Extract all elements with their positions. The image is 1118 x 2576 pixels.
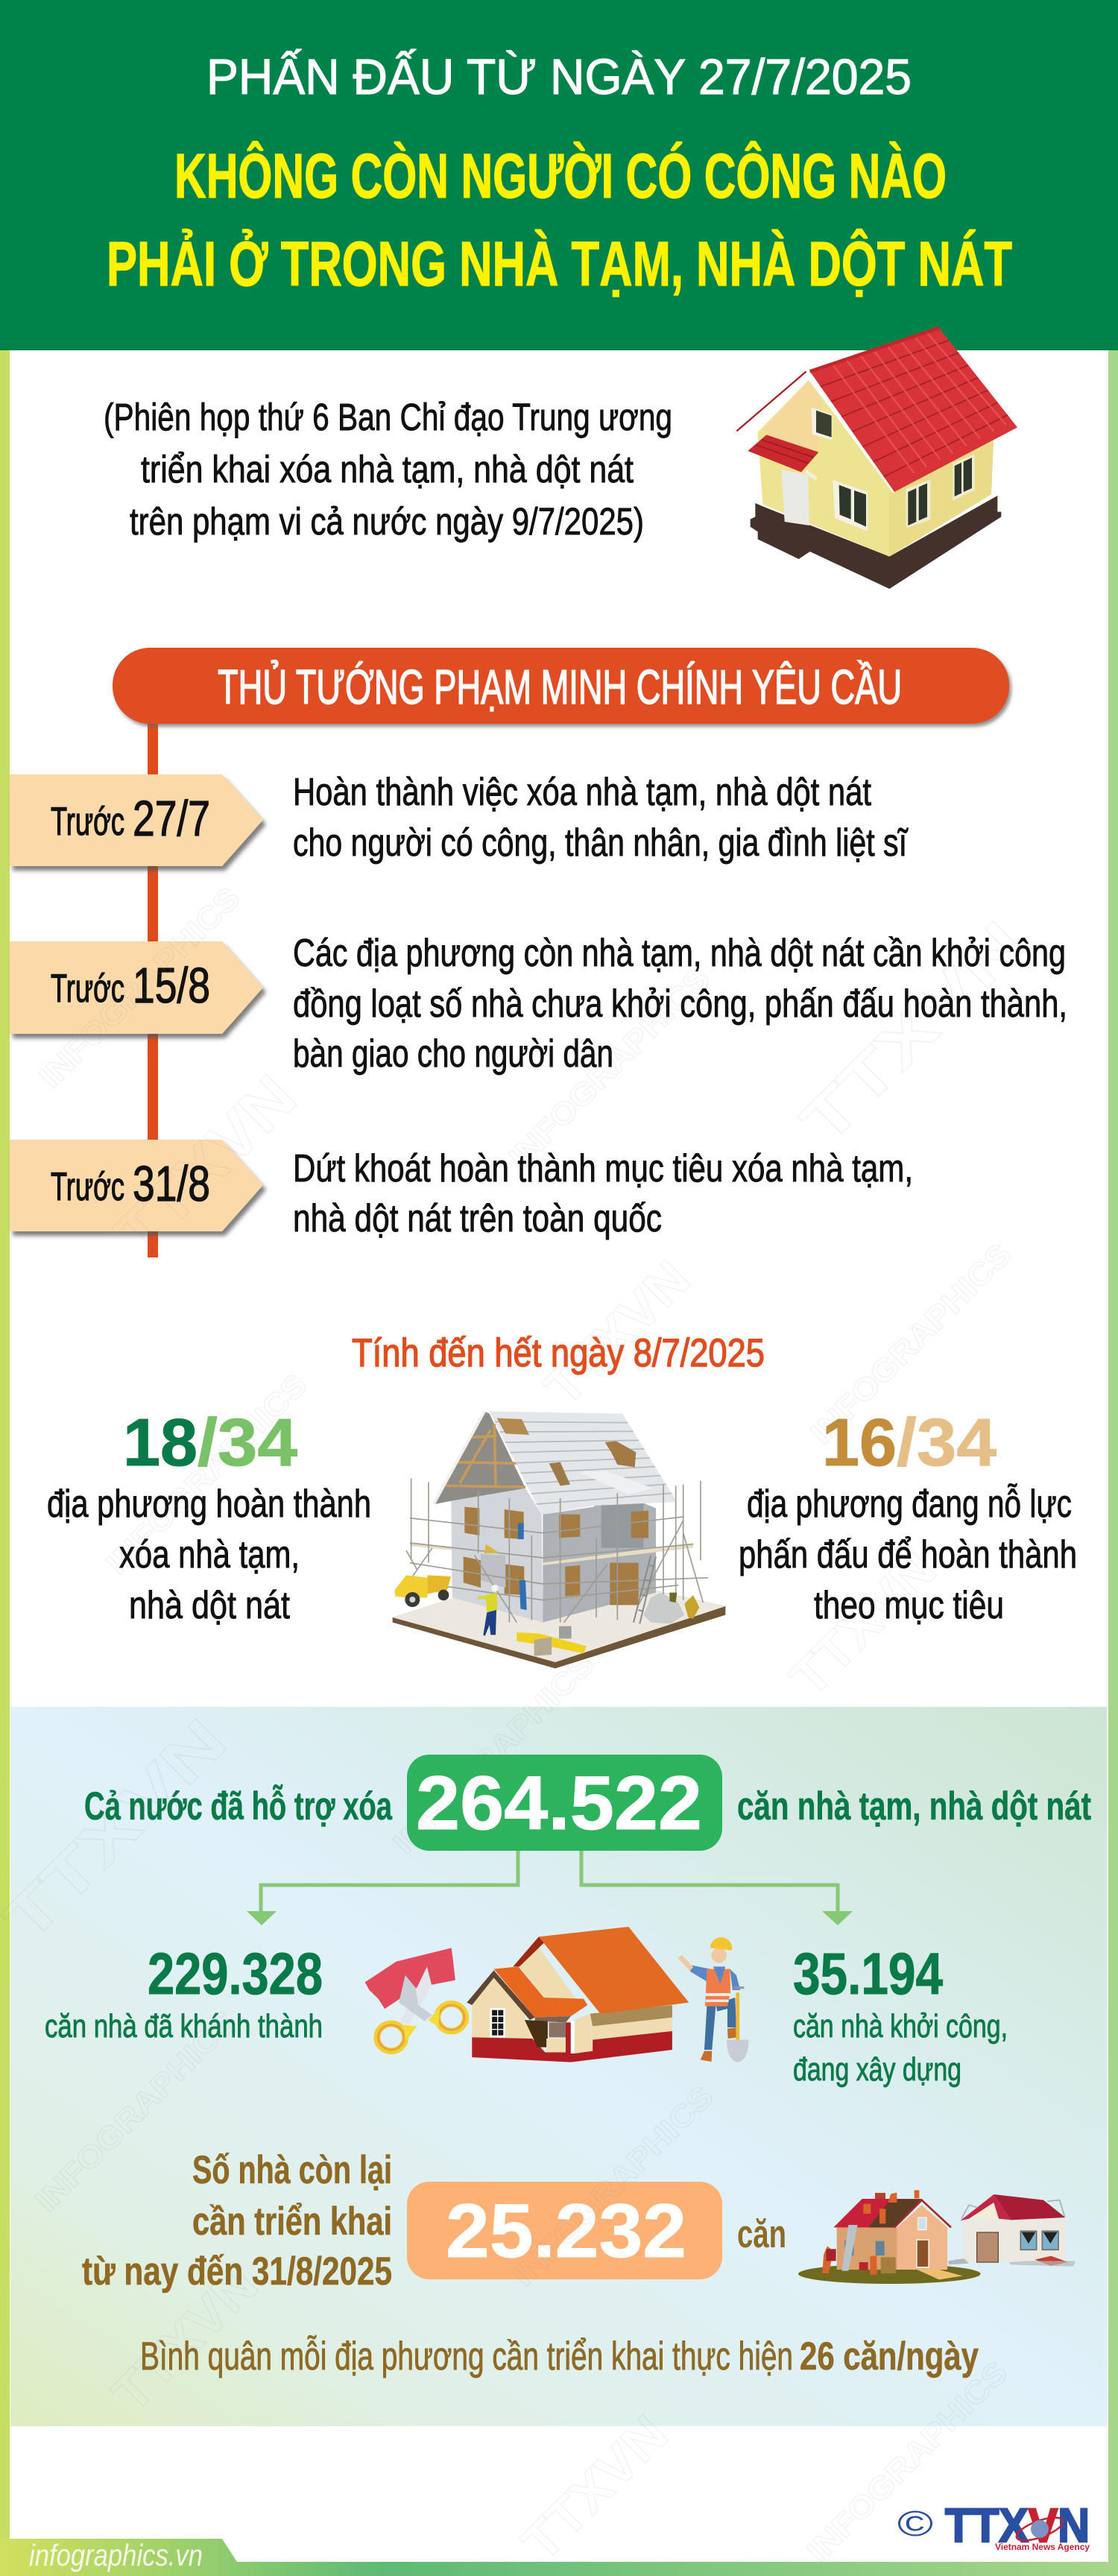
watermarks: [0, 880, 1037, 2572]
stat: 16/34: [822, 1406, 997, 1480]
house being repaired: [822, 2190, 951, 2275]
requirement text 2: bàn giao cho người dân: [293, 1032, 613, 1076]
deadline tag: 15/8: 15/8: [133, 958, 210, 1014]
icon: red roof house: [736, 328, 1017, 589]
number box: 264.522: 264.522: [416, 1761, 702, 1846]
stat: 35.194 under construction: đang xây dựng: [793, 2051, 961, 2088]
damaged house: [948, 2194, 1076, 2267]
header banner: [0, 0, 1118, 350]
text: remaining houses: Số nhà còn lại: [192, 2148, 392, 2192]
meeting note text: (Phiên họp thứ 6 Ban Chỉ đạo Trung ương: [104, 396, 672, 438]
deadline tag: 27/7: [10, 774, 263, 866]
watermarks: INFOGRAPHICS: [800, 2355, 1014, 2569]
meeting note text: trên phạm vi cả nước ngày 9/7/2025): [130, 500, 644, 543]
worker: [479, 1585, 499, 1636]
text: unit căn: căn: [737, 2212, 786, 2256]
ribbon: [365, 1948, 455, 2009]
illustration: repaired and damaged houses: [798, 2190, 1076, 2284]
stat: 35.194 under construction: căn nhà khởi công,: [793, 2008, 1008, 2045]
watermarks: TTXVN: [101, 1061, 309, 1269]
watermarks: INFOGRAPHICS: [386, 1647, 601, 1860]
footer bar with site tag: infographics.vn: [29, 2538, 203, 2572]
requirement text 3: Dứt khoát hoàn thành mục tiêu xóa nhà tạm,: [293, 1147, 913, 1190]
heading pill: Thủ tướng yêu cầu: [113, 648, 1009, 724]
text: national support left: Cả nước đã hỗ trợ xóa: [84, 1784, 392, 1828]
watermarks: TTXVN: [533, 1249, 701, 1417]
meeting note text: [104, 396, 672, 543]
requirement text 3: nhà dột nát trên toàn quốc: [293, 1197, 662, 1240]
copyright logo: TTXVN: Vietnam News Agency: [995, 2543, 1090, 2552]
icon: house under construction: [393, 1411, 725, 1668]
number box: 25.232: 25.232: [446, 2188, 686, 2273]
requirement text 1: cho người có công, thân nhân, gia đình liệt sĩ: [293, 821, 909, 865]
copyright logo: TTXVN: TTXVN: [945, 2498, 1090, 2552]
text: daily average: Bình quân mỗi địa phương cần triển khai thực hiện: [140, 2334, 793, 2378]
watermarks: INFOGRAPHICS: [28, 2004, 243, 2218]
text: 16/34 description: [739, 1483, 1077, 1627]
watermarks: TTXVN: [779, 1540, 947, 1708]
watermarks: INFOGRAPHICS: [32, 880, 247, 1094]
worker with shovel: [680, 1937, 748, 2062]
stat: 229.328 completed: căn nhà đã khánh thành: [45, 2008, 323, 2045]
stat: 229.328 completed: 229.328: [148, 1940, 323, 2007]
requirement text 2: [293, 932, 1067, 1076]
stat: 16/34: /34: [897, 1406, 997, 1480]
watermarks: INFOGRAPHICS: [803, 1237, 1018, 1450]
stat: 35.194 under construction: [793, 1940, 1008, 2088]
text: remaining houses: [82, 2148, 392, 2294]
text: remaining houses: cần triển khai: [192, 2200, 392, 2244]
arrow: to houses under construction: [581, 1851, 853, 1925]
meeting note text: triển khai xóa nhà tạm, nhà dột nát: [141, 448, 634, 490]
stat: 16/34: 16: [822, 1406, 897, 1480]
right green side strip: [1108, 350, 1118, 2576]
orange house: [467, 1927, 689, 2062]
deadline tag: 31/8: [10, 1140, 263, 1231]
text: 16/34 description: theo mục tiêu: [814, 1584, 1004, 1627]
stat: 18/34: /34: [198, 1406, 297, 1480]
deadline tag: 27/7: Trước: [51, 800, 124, 844]
arrow: to completed houses: [247, 1851, 518, 1925]
truck: [394, 1575, 451, 1607]
stat: 35.194 under construction: 35.194: [793, 1940, 943, 2007]
number box: 25.232: [407, 2182, 722, 2279]
text: 18/34 description: xóa nhà tạm,: [119, 1533, 300, 1576]
timeline bar: [148, 716, 158, 1257]
watermarks: TTXVN: [511, 2405, 678, 2572]
deadline tag: 15/8: [10, 941, 263, 1034]
requirement text 1: [293, 771, 909, 865]
text: remaining houses: từ nay đến 31/8/2025: [82, 2250, 392, 2294]
illustration: ribbon cutting, house and worker: [365, 1927, 748, 2062]
section heading: date: Tính đến hết ngày 8/7/2025: [352, 1331, 765, 1375]
panel: national figures: [10, 1707, 1107, 2426]
watermarks: TTXVN: [101, 2255, 268, 2423]
copyright logo: TTXVN: ©: [897, 2504, 933, 2544]
stat: 18/34: 18: [123, 1406, 198, 1480]
header kicker: PHẤN ĐẤU TỪ NGÀY 27/7/2025: [206, 49, 912, 105]
text: 18/34 description: nhà dột nát: [129, 1584, 290, 1627]
watermarks: INFOGRAPHICS: [99, 1367, 314, 1581]
requirement text 1: Hoàn thành việc xóa nhà tạm, nhà dột nát: [293, 771, 871, 814]
stat: 229.328 completed: [45, 1940, 323, 2045]
text: 18/34 description: địa phương hoàn thành: [47, 1483, 371, 1526]
left lime side strip: [0, 350, 10, 2576]
footer bar with site tag: [0, 2538, 1118, 2576]
title: [107, 141, 1012, 299]
deadline tag: 15/8: Trước: [51, 967, 124, 1011]
deadline tag: 27/7: 27/7: [133, 791, 210, 847]
text: 18/34 description: [47, 1483, 371, 1627]
deadline tag: 31/8: Trước: [51, 1165, 124, 1209]
watermarks: TTXVN: [787, 908, 1037, 1158]
watermarks: INFOGRAPHICS: [505, 2079, 720, 2293]
scissors: [377, 1966, 466, 2051]
requirement text 3: [293, 1147, 913, 1240]
deadline tag: 31/8: 31/8: [133, 1156, 210, 1212]
watermarks: INFOGRAPHICS: [502, 961, 716, 1175]
stat: 18/34: [123, 1406, 297, 1480]
text: daily average: 26 căn/ngày: [800, 2334, 979, 2378]
